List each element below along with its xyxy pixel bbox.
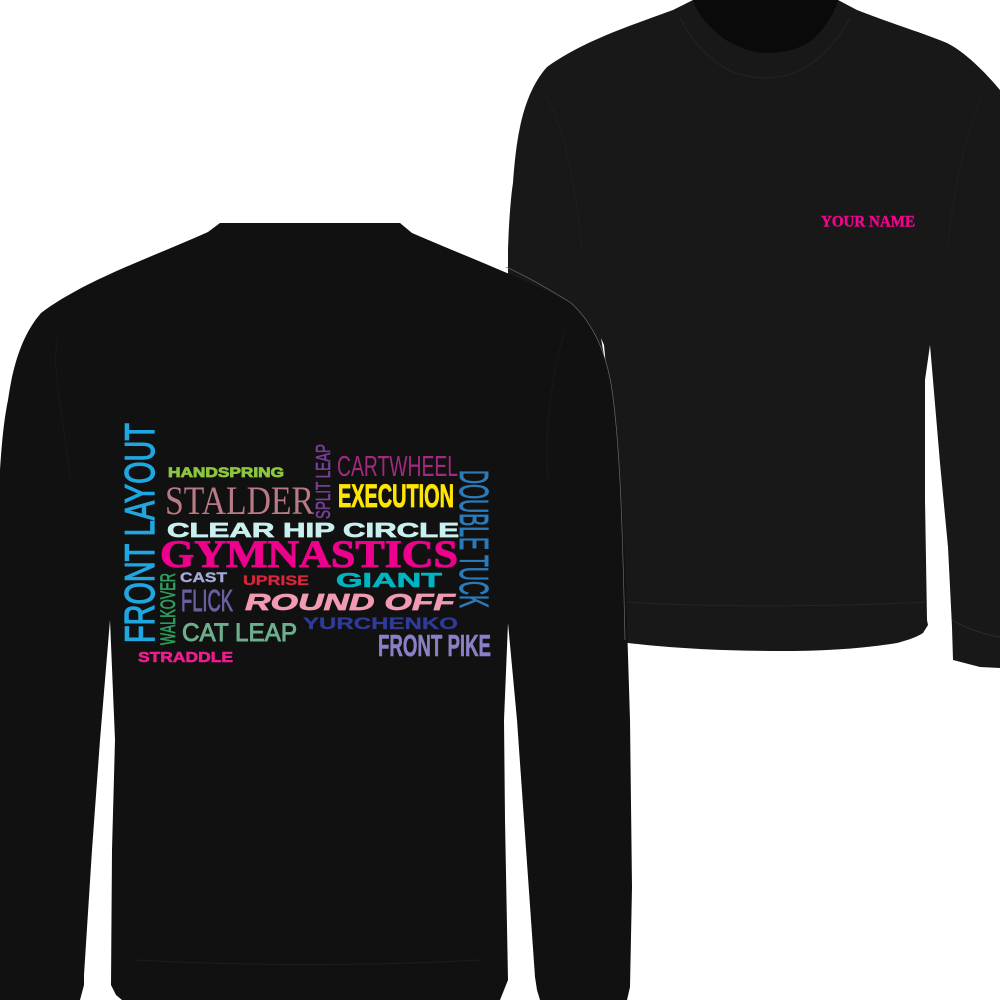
word: CLEAR HIP CIRCLE: CLEAR HIP CIRCLE [167,520,459,542]
word: FLICK: FLICK [181,583,233,618]
front cuff stitching [952,620,1000,637]
back view sweatshirt [0,223,632,1000]
gymnastics word cloud: DOUBLE TUCK [451,470,497,608]
front collar stitching [680,18,850,78]
word: ROUND OFF: ROUND OFF [245,589,456,615]
word: CAT LEAP: CAT LEAP [182,619,297,647]
word: WALKOVER: WALKOVER [157,573,180,645]
word: STALDER: STALDER [165,478,314,523]
word: EXECUTION: EXECUTION [338,478,454,514]
front view sweatshirt [508,0,1000,668]
gap sliver behind back shoulder [601,338,606,366]
back sweatshirt body [0,223,632,1000]
word: SPLIT LEAP: SPLIT LEAP [313,444,335,519]
word: FRONT LAYOUT: FRONT LAYOUT [116,423,163,643]
word: FRONT PIKE: FRONT PIKE [378,628,491,663]
word: GIANT: GIANT [336,570,442,592]
word: CARTWHEEL: CARTWHEEL [337,451,458,483]
back hem stitching [135,960,480,964]
word: YURCHENKO: YURCHENKO [303,614,458,633]
name print: YOUR NAME [821,214,915,230]
front hem stitching [628,602,925,606]
word: HANDSPRING: HANDSPRING [168,464,284,480]
back sleeve seams [56,330,565,480]
word: GYMNASTICS: GYMNASTICS [160,533,458,576]
word: UPRISE: UPRISE [243,572,309,588]
word: STRADDLE: STRADDLE [138,649,233,666]
back shoulder edge highlight [506,267,625,640]
front sleeve seams [545,95,980,250]
front neck opening [693,0,838,53]
word: CAST: CAST [180,569,228,585]
gymnastics word cloud [116,423,497,666]
front sweatshirt body [508,0,1000,668]
